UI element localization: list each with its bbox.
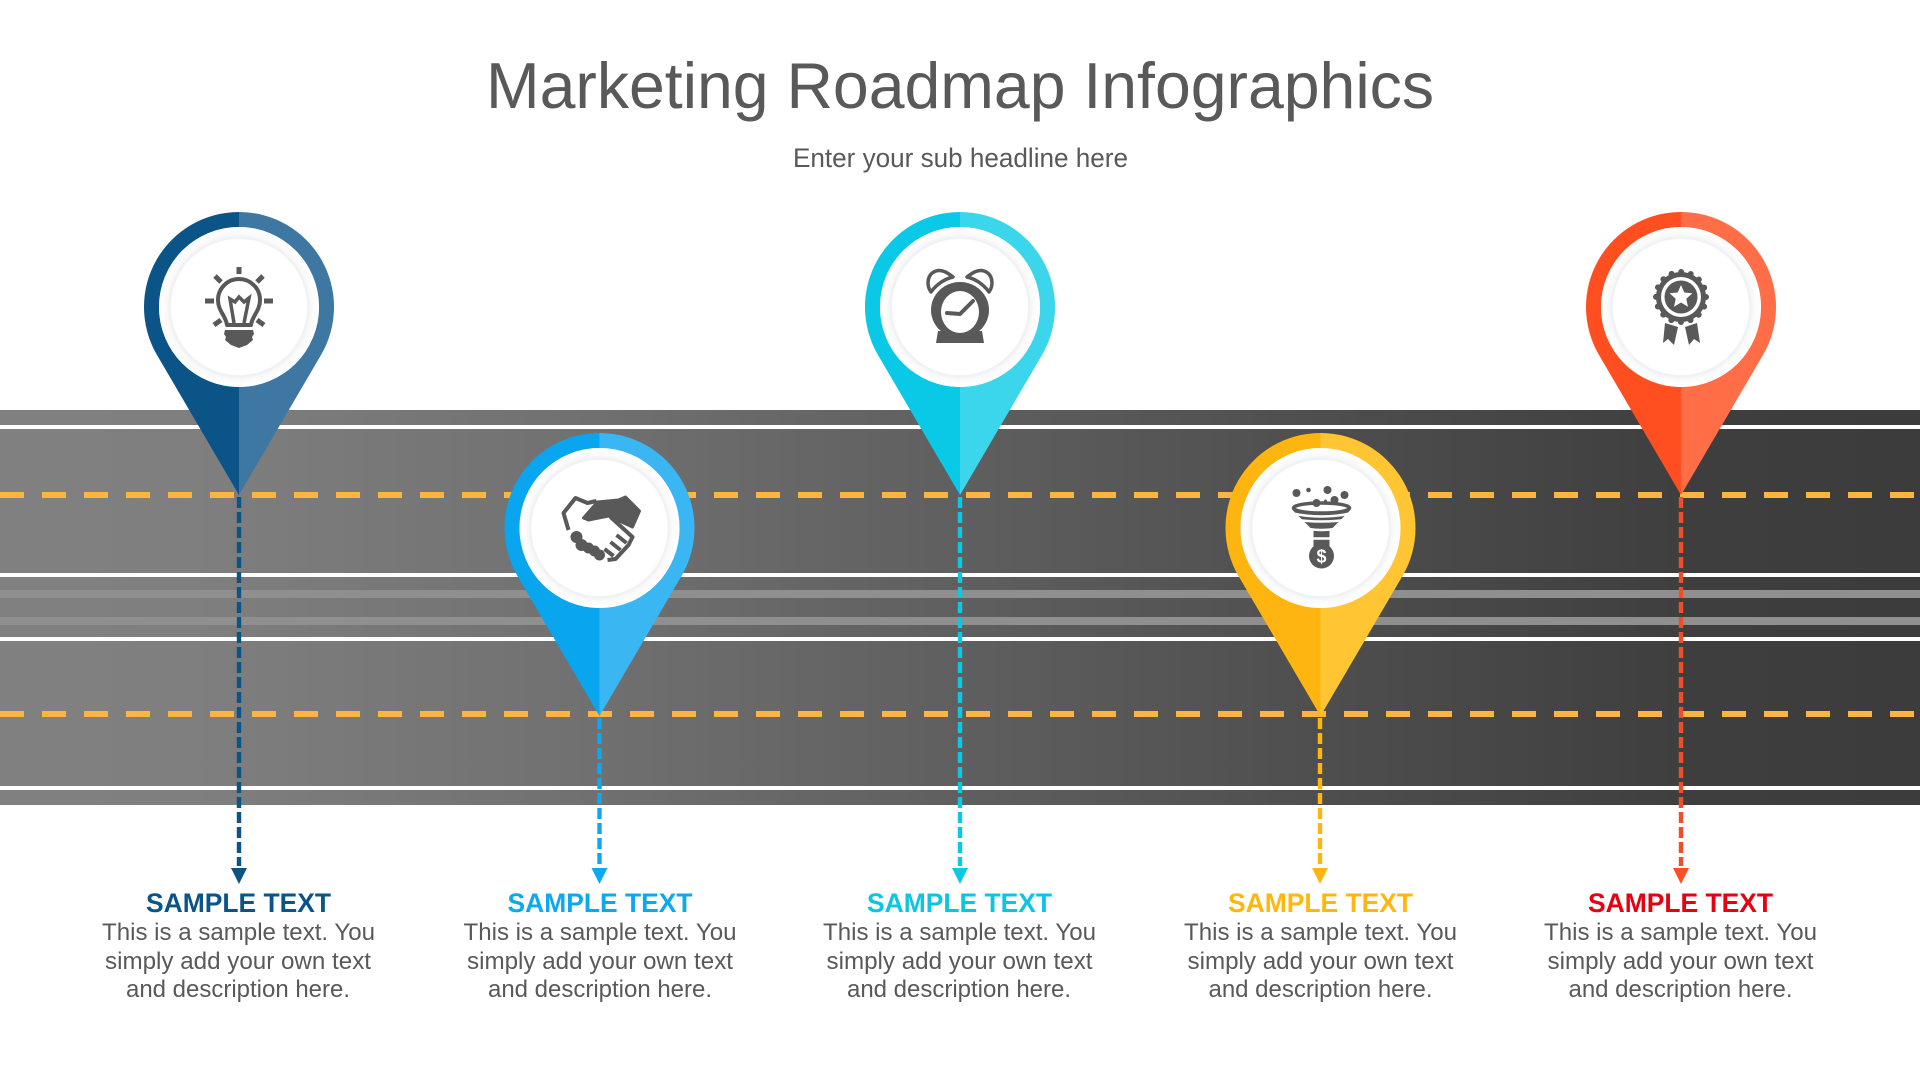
pin 1: idea (144, 212, 334, 495)
text block 4: and description here. (1208, 976, 1432, 1003)
arrow: connector 5 (1673, 497, 1689, 884)
text block 5: This is a sample text. You (1544, 919, 1817, 946)
text block 4: simply add your own text (1188, 948, 1454, 975)
icon: alarm clock (928, 271, 992, 343)
text block 1 (102, 888, 375, 1003)
text block 2: This is a sample text. You (464, 919, 736, 946)
icon: money funnel (1290, 486, 1352, 568)
text block 3: SAMPLE TEXT (867, 888, 1052, 918)
text block 5: simply add your own text (1548, 948, 1814, 975)
text block 3 (823, 888, 1096, 1003)
icon: award ribbon (1656, 272, 1706, 345)
text block 3: and description here. (847, 976, 1071, 1003)
text block 3: simply add your own text (826, 948, 1093, 975)
icon: money funnel: $ (1316, 546, 1327, 566)
text block 5: SAMPLE TEXT (1588, 888, 1773, 918)
text block 1: simply add your own text (105, 948, 371, 975)
arrow: connector 4 (1312, 718, 1328, 884)
text block 2: and description here. (488, 976, 712, 1003)
icon: light bulb (205, 267, 273, 348)
text block 2: SAMPLE TEXT (508, 888, 693, 918)
text block 5 (1544, 888, 1817, 1003)
text block 4 (1184, 888, 1457, 1003)
text block 4: SAMPLE TEXT (1228, 888, 1413, 918)
arrow: connector 2 (592, 718, 608, 884)
text block 1: SAMPLE TEXT (146, 888, 331, 918)
text block 2: simply add your own text (467, 948, 733, 975)
road (0, 410, 1920, 805)
pin 4: funnel (1225, 433, 1416, 716)
text block 4: This is a sample text. You (1184, 919, 1457, 946)
text block 1: This is a sample text. You (102, 919, 375, 946)
arrow: connector 1 (231, 497, 247, 884)
text block 3: This is a sample text. You (823, 919, 1096, 946)
text block 2 (464, 888, 736, 1003)
title: Marketing Roadmap Infographics (486, 49, 1434, 122)
text block 5: and description here. (1568, 976, 1792, 1003)
pin 3: time (865, 212, 1055, 495)
pin 5: award (1586, 212, 1776, 495)
text block 1: and description here. (126, 976, 350, 1003)
subtitle: Enter your sub headline here (793, 143, 1128, 173)
pin 2: partnership (504, 433, 695, 716)
arrow: connector 3 (952, 497, 968, 884)
icon: handshake (564, 497, 640, 560)
